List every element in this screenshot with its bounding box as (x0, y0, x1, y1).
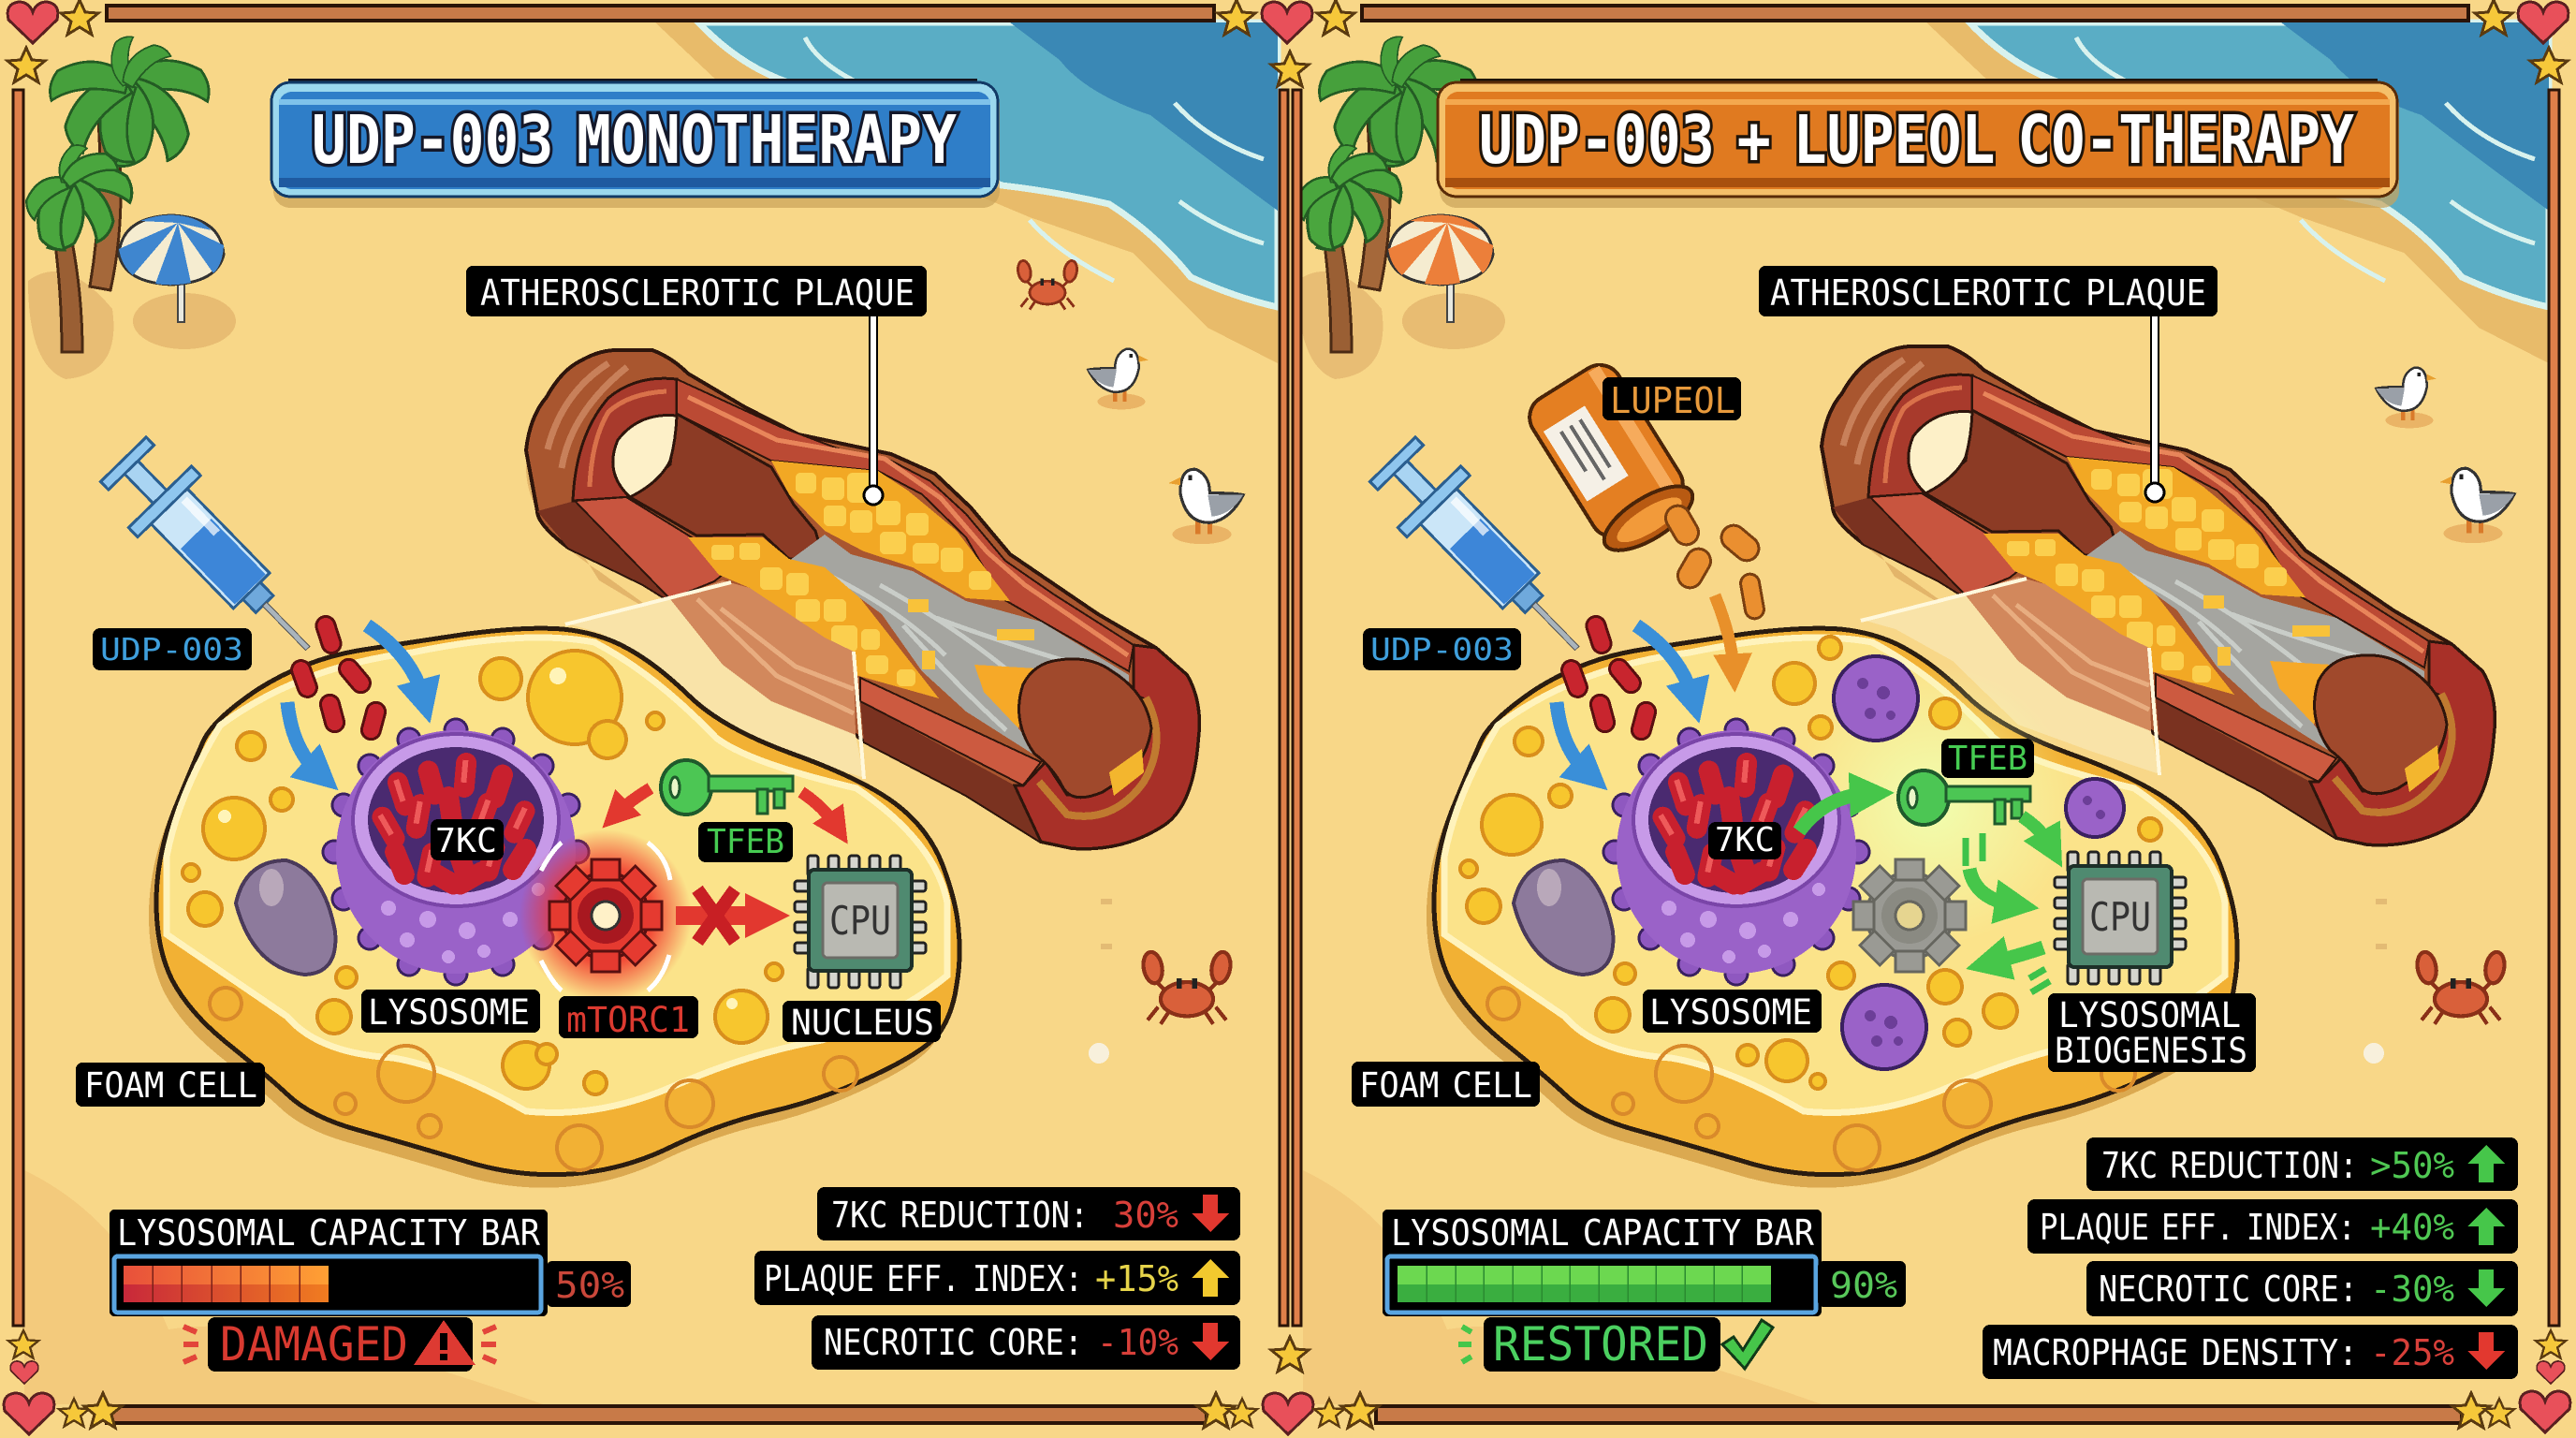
foam cell (1427, 628, 2237, 1188)
lower plaque lipid (688, 537, 939, 698)
stat: 7KC reduction: 7KC REDUCTION: (831, 1195, 1089, 1236)
lysosomal capacity bar: LYSOSOMAL CAPACITY BAR (1391, 1212, 1814, 1254)
orange arrow (1715, 595, 1734, 669)
stat: necrotic core: NECROTIC CORE: (824, 1322, 1083, 1363)
fat droplets (183, 651, 783, 1094)
stat: 7KC reduction (817, 1187, 1240, 1240)
stat: plaque eff index: +15% (1095, 1258, 1178, 1299)
atherosclerotic plaque label: ATHEROSCLEROTIC PLAQUE (1770, 272, 2206, 314)
lens lines (565, 582, 864, 779)
CPU nucleus: CPU (2089, 894, 2151, 940)
LYSOSOME label: LYSOSOME (368, 992, 530, 1033)
syringe (1361, 429, 1608, 679)
syringe (92, 429, 339, 679)
palm shadow (28, 271, 113, 379)
TFEB label: TFEB (707, 823, 784, 861)
shell (2364, 899, 2387, 1064)
stat: plaque eff index: PLAQUE EFF. INDEX: (764, 1258, 1083, 1299)
TFEB key (661, 760, 793, 814)
foam cell (149, 628, 959, 1188)
palm shadow (1297, 271, 1383, 379)
panel: UDP-003 monotherapy scene (21, 22, 1278, 1404)
lysosome (1603, 719, 1869, 985)
artery outer wall (526, 350, 1199, 848)
UDP-003 capsules (1559, 614, 1658, 741)
crab small (1017, 259, 1078, 310)
shell (1089, 899, 1112, 1064)
stat: 7KC reduction: 7KC REDUCTION: (2101, 1145, 2358, 1186)
FOAM CELL label: FOAM CELL (84, 1065, 257, 1106)
title banner: UDP-003 + LUPEOL CO-THERAPY (1479, 101, 2354, 179)
umbrella (119, 215, 236, 349)
UDP-003 label: UDP-003 (100, 631, 243, 668)
fat droplets (1460, 637, 2161, 1089)
stat: macrophage density (1983, 1325, 2518, 1379)
end lumen (1019, 659, 1151, 798)
seagull large (1168, 469, 1243, 544)
lipid near lumen (974, 665, 1036, 728)
blocked arrow to nucleus (676, 889, 763, 942)
title banner (271, 79, 1000, 208)
title banner (1438, 79, 2399, 208)
lysosomal capacity bar (1383, 1210, 1822, 1316)
DAMAGED status (183, 1317, 496, 1372)
panel: UDP-003 + lupeol co-therapy scene (1290, 22, 2549, 1404)
pill bottle (1521, 357, 1702, 563)
purple vesicles (1834, 656, 2124, 1069)
CPU nucleus (2055, 852, 2186, 984)
ocean (655, 22, 1278, 363)
gray fibrous core (789, 535, 1129, 762)
stat: macrophage density: -25% (2370, 1332, 2454, 1373)
lysosomal biogenesis label (2048, 993, 2256, 1072)
umbrella (1388, 215, 1505, 349)
7KC label: 7KC (1715, 821, 1775, 859)
atherosclerotic plaque label: ATHEROSCLEROTIC PLAQUE (480, 272, 915, 314)
cut ring (573, 378, 677, 501)
stat: necrotic core: -30% (2370, 1269, 2454, 1310)
seagull large (2439, 468, 2514, 543)
RESTORED status: RESTORED (1493, 1317, 1708, 1372)
crab large (1141, 950, 1233, 1024)
upper plaque lipid (771, 461, 1010, 601)
stat: plaque eff index: +40% (2370, 1207, 2454, 1248)
end crescent (1015, 645, 1199, 848)
NUCLEUS label: NUCLEUS (791, 1003, 934, 1043)
title banner: UDP-003 MONOTHERAPY (312, 101, 957, 179)
50% value: 50% (555, 1265, 624, 1306)
stat: plaque eff index (2027, 1199, 2518, 1254)
90% value (1818, 1261, 1906, 1307)
90% value: 90% (1830, 1265, 1897, 1306)
palm trees (21, 35, 212, 352)
lysosomal capacity bar: LYSOSOMAL CAPACITY BAR (117, 1212, 540, 1254)
green arrow key to nucleus (2022, 816, 2050, 845)
lysosome (323, 719, 589, 985)
lupeol pills (1661, 501, 1765, 620)
key glow (1793, 665, 2073, 946)
sand shading (1303, 1170, 1822, 1404)
artery shadow (526, 463, 670, 623)
red arrow key to gear (618, 788, 651, 813)
mTORC1 label: mTORC1 (566, 1000, 690, 1040)
LUPEOL label: LUPEOL (1610, 380, 1735, 421)
TFEB key (1898, 770, 2030, 825)
lysosomal biogenesis label: LYSOSOMAL (2058, 995, 2241, 1035)
crab large (2415, 950, 2507, 1024)
lysosomal biogenesis label: BIOGENESIS (2055, 1031, 2247, 1071)
stat: necrotic core (2086, 1261, 2518, 1316)
sand shading (24, 1170, 543, 1404)
blue arrows (287, 625, 423, 772)
seagull small (1088, 349, 1149, 409)
red arrow key to nucleus (801, 792, 836, 826)
stat: 7KC reduction (2086, 1137, 2518, 1191)
stat: necrotic core: NECROTIC CORE: (2099, 1269, 2358, 1310)
stat: necrotic core (812, 1315, 1240, 1370)
plaque leader line (2145, 309, 2164, 502)
stat: 7KC reduction: >50% (2370, 1145, 2454, 1186)
stat: 7KC reduction: 30% (1113, 1195, 1178, 1236)
hole (613, 416, 677, 497)
green arrow lysosome to key (1799, 794, 1867, 831)
green arrow to nucleus from nuclear translocation (1969, 869, 2012, 904)
plaque leader line (864, 309, 883, 505)
magnified lens area (564, 599, 864, 778)
palm trees (1290, 35, 1482, 352)
inactive mTORC1 gear (1853, 859, 1966, 972)
lens wall band (670, 580, 856, 735)
DAMAGED status: DAMAGED (220, 1317, 408, 1372)
stat: plaque eff index (754, 1251, 1240, 1305)
artery with plaque (526, 350, 1199, 848)
FOAM CELL label: FOAM CELL (1359, 1065, 1532, 1106)
UDP-003 capsules (289, 614, 388, 741)
lower wall band (575, 497, 723, 599)
LYSOSOME label: LYSOSOME (1649, 992, 1812, 1033)
stat: necrotic core: -10% (1097, 1322, 1178, 1363)
TFEB label: TFEB (1948, 740, 2027, 778)
artery with plaque (1822, 346, 2495, 844)
UDP-003 label: UDP-003 (1370, 631, 1514, 668)
stat: plaque eff index: PLAQUE EFF. INDEX: (2040, 1207, 2356, 1248)
7KC label: 7KC (435, 822, 497, 860)
50% value (547, 1261, 631, 1307)
sparkles (1966, 833, 2050, 992)
lumen interior (630, 414, 825, 561)
CPU nucleus (795, 856, 926, 988)
ocean (1926, 22, 2549, 363)
seagull small (2376, 368, 2437, 428)
CPU nucleus: CPU (829, 898, 891, 944)
blue arrows (1557, 625, 1692, 772)
stat: macrophage density: MACROPHAGE DENSITY: (1993, 1332, 2358, 1373)
green arrow nucleus to biogenesis (1992, 947, 2043, 962)
upper wall bands (677, 379, 1134, 671)
mTORC1 gear red glow (520, 829, 692, 1002)
lysosomal capacity bar (110, 1210, 548, 1316)
